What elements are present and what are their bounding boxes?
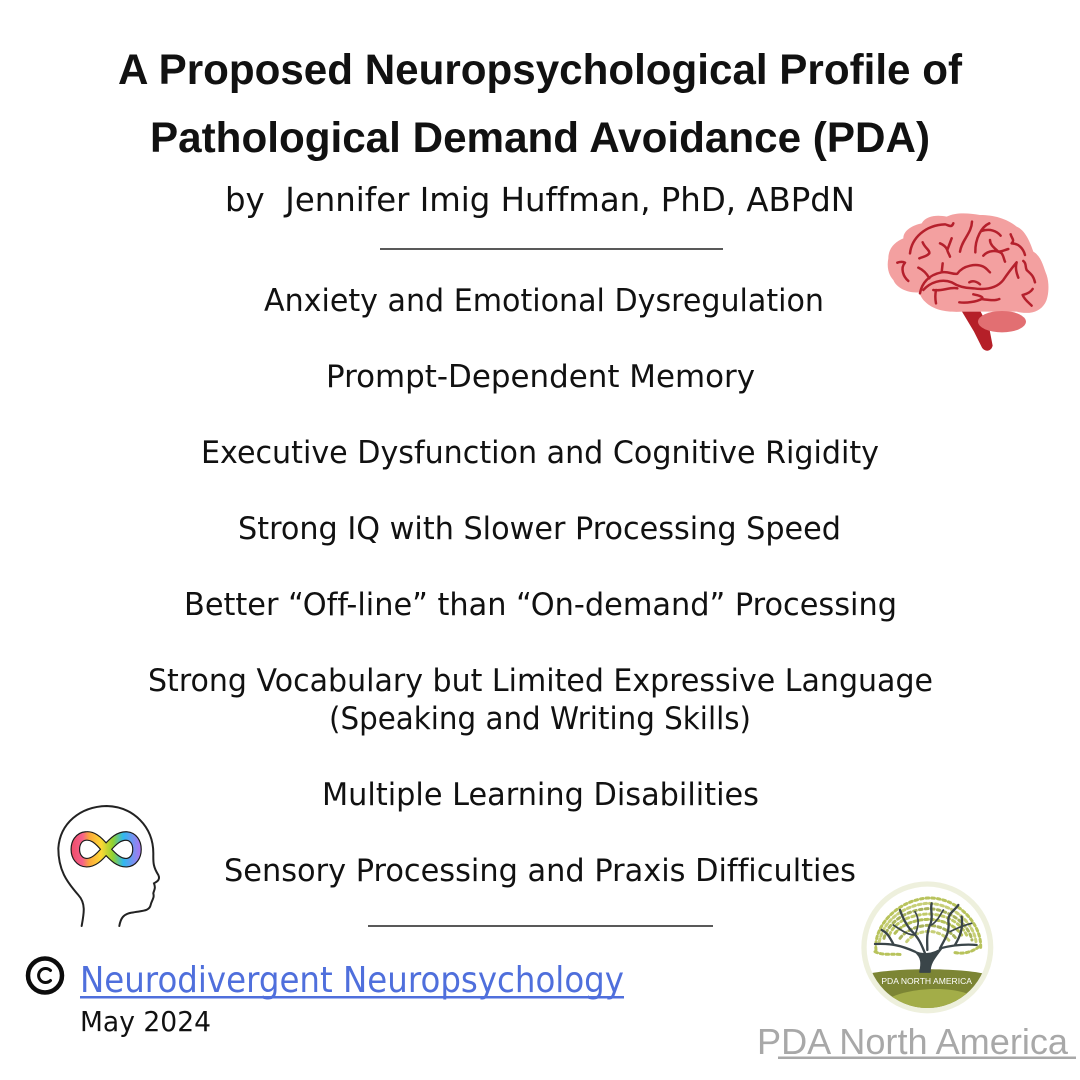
item: memory: Prompt-Dependent Memory (326, 359, 755, 395)
icon: head with rainbow infinity (58, 806, 159, 926)
leaves (875, 898, 981, 955)
link: Neurodivergent Neuropsychology: Neurodivergent Neuropsychology (80, 960, 624, 1001)
item: anxiety: Anxiety and Emotional Dysregulation (264, 283, 824, 319)
profile list (148, 283, 933, 889)
tree (875, 903, 977, 972)
item: learning: Multiple Learning Disabilities (322, 777, 759, 813)
author byline: by Jennifer Imig Huffman, PhD, ABPdN (225, 180, 855, 219)
item: vocabulary: Strong Vocabulary but Limited Expressive Language (148, 663, 933, 699)
date: May 2024 (80, 1005, 211, 1038)
link: PDA North America: PDA North America (757, 1021, 1069, 1062)
icon: brain (888, 213, 1048, 351)
item: sensory: Sensory Processing and Praxis Difficulties (224, 853, 856, 889)
title: A Proposed Neuropsychological Profile of (118, 46, 963, 94)
item: vocabulary (148, 663, 933, 737)
logo text: PDA NORTH AMERICA (881, 976, 972, 986)
item: processing: Better “Off-line” than “On-demand” Processing (184, 587, 897, 623)
item: executive: Executive Dysfunction and Cognitive Rigidity (201, 435, 879, 471)
title (118, 46, 963, 162)
item: vocabulary: (Speaking and Writing Skills) (329, 701, 751, 737)
icon: copyright (28, 958, 62, 992)
logo: PDA North America (861, 881, 993, 1017)
title: Pathological Demand Avoidance (PDA) (150, 114, 930, 162)
item: IQ: Strong IQ with Slower Processing Speed (238, 511, 841, 547)
